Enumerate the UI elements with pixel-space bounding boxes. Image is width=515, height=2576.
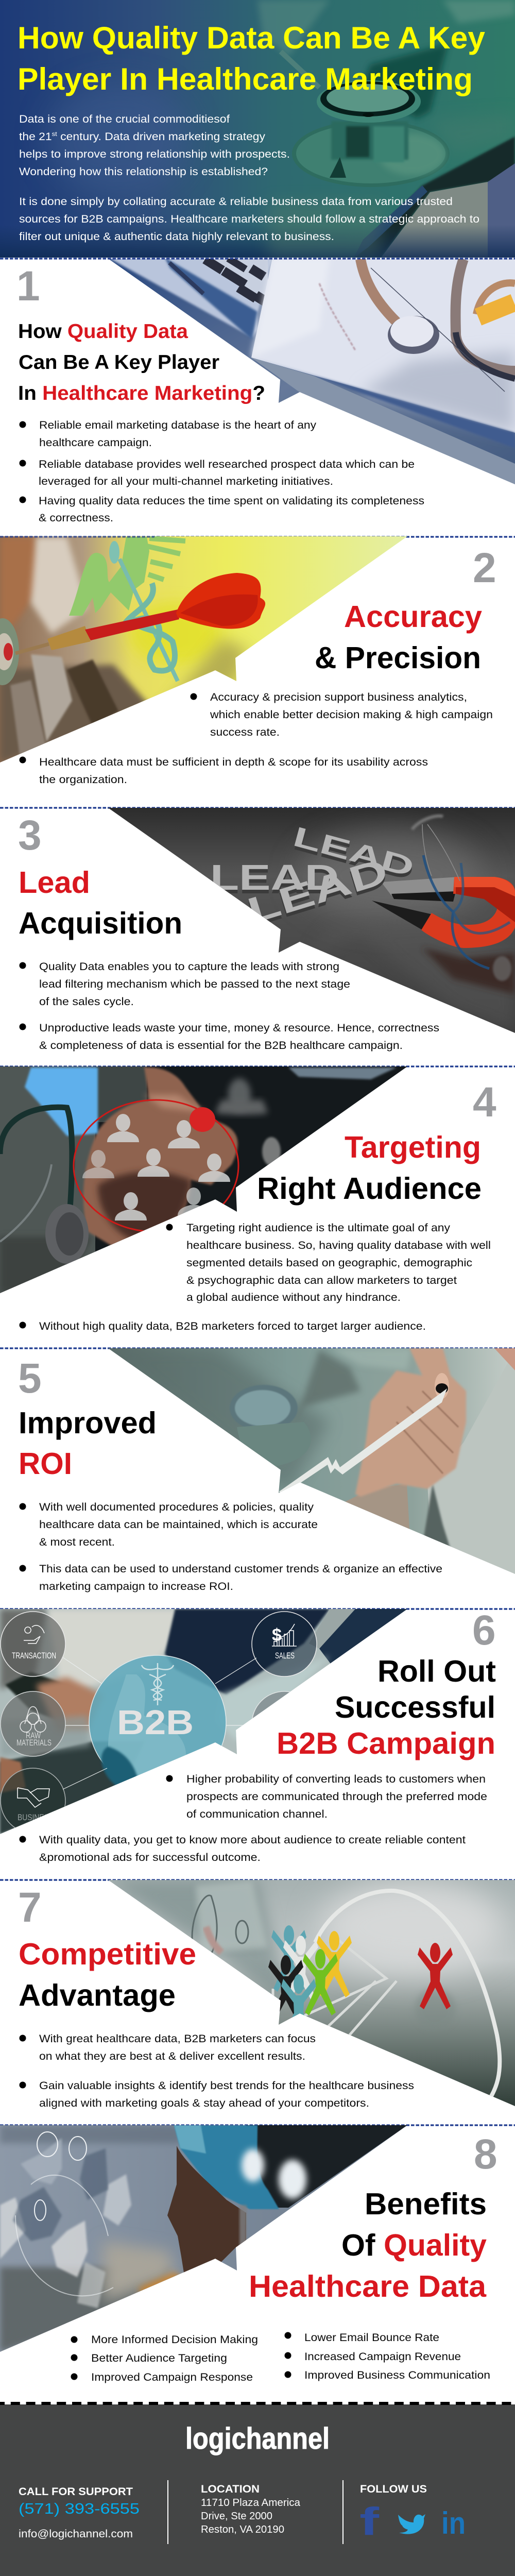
location: Reston, VA 20190 — [201, 2524, 284, 2535]
heading: ROI — [19, 1447, 72, 1481]
bullet list: Accuracy & precision support business analytics, — [210, 691, 467, 703]
photo: laptop and stethoscope on charts — [103, 255, 515, 489]
bullet list: prospects are communicated through the preferred mode — [186, 1791, 487, 1803]
photo: hand drawing rising arrow — [103, 1348, 515, 1575]
benefits list: Lower Email Bounce Rate — [304, 2332, 439, 2344]
bullet list: &promotional ads for successful outcome. — [39, 1852, 261, 1863]
intro text — [19, 113, 479, 243]
panel: section 7 — [18, 1880, 515, 2112]
icon: facebook: f — [359, 2500, 380, 2544]
benefits list: Better Audience Targeting — [91, 2352, 227, 2364]
heading — [19, 1406, 157, 1481]
bullet list — [20, 1222, 491, 1332]
bullet list: With well documented procedures & policies, quality — [39, 1501, 314, 1513]
photo: colourful figures and arc — [103, 1880, 515, 2112]
intro text: the 21 — [19, 131, 49, 143]
call for support: (571) 393-6555 — [19, 2501, 140, 2517]
bullet list: healthcare campaign. — [39, 437, 152, 449]
intro text: Wondering how this relationship is established? — [19, 166, 268, 178]
intro text: sources for B2B campaigns. Healthcare marketers should follow a strategic approach to — [19, 213, 479, 225]
heading: Of Quality — [341, 2228, 487, 2262]
bullet list: segmented details based on geographic, demographic — [186, 1257, 472, 1269]
header photo: stethoscope and data — [0, 0, 515, 258]
title: Player In Healthcare Marketing — [18, 62, 473, 96]
small labels and icons — [12, 1624, 297, 1822]
bullet list — [20, 961, 439, 1052]
figures — [268, 1925, 453, 2041]
bullet list: healthcare data can be maintained, which is accurate — [39, 1519, 318, 1531]
panel: section 8 — [0, 2125, 497, 2383]
bullet list: a global audience without any hindrance. — [186, 1292, 401, 1303]
LEAD letters: LEAD — [210, 857, 339, 897]
bullet list: lead filtering mechanism which be passed to the next stage — [39, 978, 350, 990]
heading: Healthcare Data — [249, 2269, 487, 2303]
number 2: 2 — [473, 545, 496, 591]
bullet list: & most recent. — [39, 1536, 115, 1548]
heading: Competitive — [19, 1937, 196, 1971]
intro text: helps to improve strong relationship with prospects. — [19, 148, 290, 160]
small labels and icons: SALES — [275, 1651, 295, 1660]
number 1: 1 — [16, 263, 40, 310]
location: LOCATION — [201, 2483, 260, 2495]
intro text: century. Data driven marketing strategy — [57, 131, 266, 143]
bullet list: on what they are best at & deliver excellent results. — [39, 2050, 305, 2062]
bullet list: Higher probability of converting leads to customers when — [186, 1773, 486, 1785]
panel: section 4 — [0, 1065, 496, 1332]
stethoscope — [292, 80, 450, 187]
intro text: filter out unique & authentic data highly relevant to business. — [19, 231, 334, 243]
heading — [315, 600, 482, 675]
bullet list: leveraged for all your multi-channel marketing initiatives. — [39, 476, 333, 487]
heading: Can Be A Key Player — [19, 351, 219, 374]
benefits list: More Informed Decision Making — [91, 2334, 258, 2346]
bullet list: Healthcare data must be sufficient in depth & scope for its usability across — [39, 756, 428, 768]
bullet list — [20, 691, 493, 786]
bullet list — [20, 419, 424, 524]
bullet list: Unproductive leads waste your time, money & resource. Hence, correctness — [39, 1022, 439, 1034]
heading: B2B Campaign — [277, 1726, 495, 1760]
icon: linkedin: in — [441, 2506, 466, 2540]
photo: surgeon and medical hexagons — [0, 2125, 412, 2354]
heading: How Quality Data — [18, 320, 188, 343]
benefits list — [71, 2332, 490, 2383]
magnet — [372, 877, 515, 994]
intro text: st — [52, 130, 58, 138]
location — [201, 2483, 301, 2535]
panel: section 2 — [0, 536, 496, 786]
heading: Improved — [19, 1406, 157, 1440]
bullet list: the organization. — [39, 774, 127, 786]
heading — [257, 1130, 482, 1206]
bullet list: healthcare business. So, having quality database with well — [186, 1240, 491, 1251]
small labels and icons: RAW — [26, 1731, 41, 1740]
panel: section 6 — [0, 1607, 496, 1863]
bullet list: Having quality data reduces the time spent on validating its completeness — [39, 495, 424, 507]
heading: Lead — [19, 866, 90, 900]
bullet list: aligned with marketing goals & stay ahead of your competitors. — [39, 2097, 369, 2109]
heading — [249, 2187, 487, 2303]
bullet list: With quality data, you get to know more about audience to create reliable content — [39, 1834, 466, 1846]
heading: Targeting — [345, 1130, 481, 1164]
heading: Right Audience — [257, 1172, 482, 1206]
bullet list: marketing campaign to increase ROI. — [39, 1581, 233, 1592]
bullet list: Quality Data enables you to capture the leads with strong — [39, 961, 339, 973]
number 6: 6 — [472, 1607, 496, 1654]
bullet list: & completeness of data is essential for the B2B healthcare campaign. — [39, 1040, 403, 1052]
heading — [19, 866, 182, 940]
bullet list: Gain valuable insights & identify best trends for the healthcare business — [39, 2080, 414, 2092]
small labels and icons: BUSINESS — [18, 1812, 54, 1822]
call for support: CALL FOR SUPPORT — [19, 2486, 133, 2498]
bullet list: of communication channel. — [186, 1808, 328, 1820]
icon: twitter — [398, 2514, 425, 2534]
intro text: Data is one of the crucial commoditiesof — [19, 113, 230, 125]
heading: Benefits — [365, 2187, 487, 2221]
bullet list — [20, 2033, 414, 2109]
LEAD letters: LEAD — [243, 851, 392, 931]
bullet list: of the sales cycle. — [39, 996, 134, 1008]
LEAD letters: LEAD — [290, 821, 417, 883]
network circles — [1, 1612, 317, 1833]
panel: section 3 — [18, 808, 515, 1052]
number 3: 3 — [18, 812, 42, 859]
heading: Acquisition — [19, 906, 182, 940]
bullet list: Targeting right audience is the ultimate goal of any — [186, 1222, 451, 1234]
bullet list: This data can be used to understand customer trends & organize an effective — [39, 1563, 442, 1575]
number 8: 8 — [474, 2131, 497, 2178]
icon: caduceus — [142, 1663, 174, 1705]
bullet list: Without high quality data, B2B marketers forced to target larger audience. — [39, 1320, 426, 1332]
panel: section 1 — [16, 255, 515, 524]
photo: B2B handshake — [0, 1609, 412, 1836]
bullet list — [20, 1773, 487, 1863]
bullet list: Reliable database provides well researched prospect data which can be — [39, 459, 415, 470]
dart — [15, 573, 265, 653]
follow us — [359, 2483, 466, 2544]
heading: In Healthcare Marketing ? — [18, 382, 265, 404]
intro text: It is done simply by collating accurate & reliable business data from various trusted — [19, 196, 453, 208]
heading — [18, 320, 265, 404]
heading — [19, 1937, 196, 2012]
header panel — [0, 0, 515, 258]
title: How Quality Data Can Be A Key — [18, 21, 486, 55]
small labels and icons: $ — [272, 1625, 282, 1645]
panel: section 5 — [18, 1348, 515, 1592]
B2B label: B2B — [117, 1703, 194, 1742]
location: 11710 Plaza America — [201, 2497, 301, 2509]
LEAD letters — [210, 821, 417, 931]
logo: logichannel — [185, 2422, 330, 2455]
small labels and icons: TRANSACTION — [12, 1651, 56, 1660]
benefits list: Increased Campaign Revenue — [304, 2351, 461, 2363]
photo: dart and caduceus — [0, 536, 412, 765]
bullet list: which enable better decision making & high campaign — [210, 709, 493, 721]
heading: Accuracy — [344, 600, 482, 634]
number 4: 4 — [473, 1079, 496, 1126]
bullet list — [20, 1501, 442, 1592]
bullet list: With great healthcare data, B2B marketers can focus — [39, 2033, 316, 2045]
number 5: 5 — [18, 1355, 42, 1402]
follow us: FOLLOW US — [360, 2483, 427, 2495]
small labels and icons: MATERIALS — [16, 1738, 52, 1748]
location: Drive, Ste 2000 — [201, 2511, 272, 2522]
bullet list: success rate. — [210, 726, 280, 738]
call for support: info@logichannel.com — [19, 2528, 133, 2540]
photo: doctor's hand circling audience — [0, 1065, 412, 1295]
bullet list: Reliable email marketing database is the heart of any — [39, 419, 317, 431]
photo: LEAD letters and magnet — [103, 808, 515, 1035]
call for support — [19, 2486, 140, 2540]
benefits list: Improved Business Communication — [304, 2369, 490, 2381]
caduceus — [69, 537, 185, 681]
heading — [277, 1654, 496, 1760]
heading: Advantage — [19, 1978, 176, 2012]
bullet list: & correctness. — [39, 512, 113, 524]
heading: Successful — [335, 1690, 495, 1724]
title — [18, 21, 486, 96]
number 7: 7 — [18, 1884, 42, 1931]
benefits list: Improved Campaign Response — [91, 2371, 253, 2383]
bullet list: & psychographic data can allow marketers to target — [186, 1275, 457, 1286]
heading: Roll Out — [377, 1654, 496, 1688]
heading: & Precision — [315, 641, 481, 675]
footer — [0, 2403, 515, 2576]
